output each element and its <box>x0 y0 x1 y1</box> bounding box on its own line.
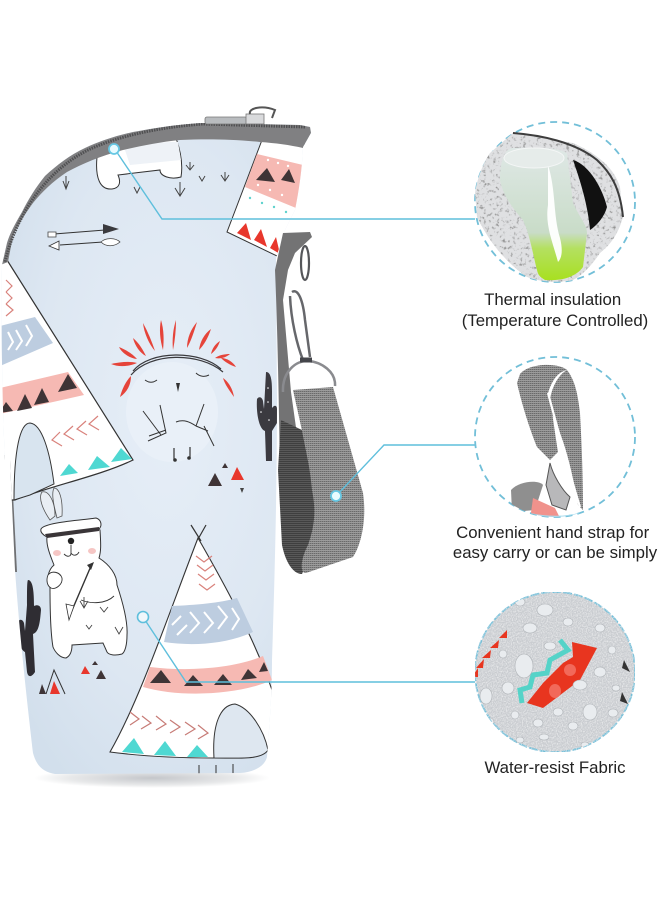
detail circle: hand strap <box>475 357 635 520</box>
metal ring and clasp <box>283 246 335 392</box>
zipper pull <box>205 107 275 124</box>
mini tent and triangles <box>39 661 106 694</box>
side strap anchor <box>275 232 312 470</box>
bear with arrow <box>41 488 127 658</box>
zipper band <box>0 120 311 265</box>
label: thermal insulation: Thermal insulation <box>484 290 621 309</box>
hand strap loop <box>278 387 364 574</box>
cactus left <box>18 580 41 676</box>
arrows <box>48 224 120 250</box>
label: hand strap: Convenient hand strap for <box>456 523 650 542</box>
leader line: water-resist fabric <box>138 612 475 682</box>
label: water-resist fabric: Water-resist Fabric <box>484 758 626 777</box>
detail circle: water-resist fabric <box>472 592 635 752</box>
small triangles middle <box>208 463 244 493</box>
bag body <box>0 110 320 790</box>
left gray side seam <box>4 455 17 572</box>
leader line: thermal insulation <box>109 144 475 219</box>
left teepee <box>0 260 133 500</box>
owl with headdress <box>111 320 236 462</box>
product: thermal bottle bag <box>0 107 364 790</box>
label: thermal insulation: (Temperature Controlled) <box>462 311 648 330</box>
ground shadow <box>34 768 270 788</box>
bottle <box>500 148 587 280</box>
leader line: hand strap <box>331 445 475 501</box>
top bear fragment <box>63 138 229 196</box>
cactus right <box>257 372 277 461</box>
upper right teepee <box>227 140 312 256</box>
detail circle: thermal insulation <box>475 122 635 282</box>
label: hand strap: easy carry or can be simply <box>453 543 658 562</box>
bottom teepee <box>110 525 272 777</box>
